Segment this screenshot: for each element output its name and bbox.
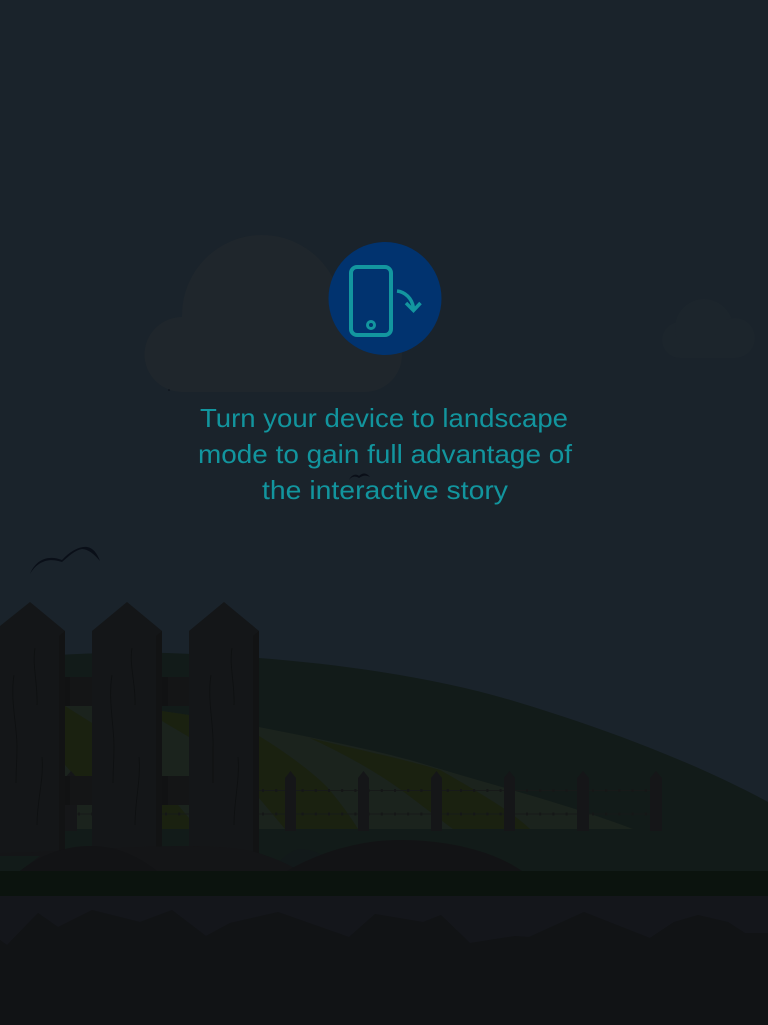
rotate arrow [397,291,420,310]
wooden fence rails [65,677,189,805]
wooden fence post 3 [189,602,259,856]
wooden fence post 1 [0,602,65,856]
bird left [30,547,100,574]
olive stripe left [259,736,358,829]
large cloud [144,235,402,392]
dark grass band [0,871,768,896]
jagged foreground terrain [0,910,768,1025]
instruction icon [328,242,442,355]
olive stripe right [310,738,530,829]
small cloud [662,299,755,358]
phone outline [351,267,391,335]
instruction text [198,403,573,505]
distant hill [0,653,768,875]
bird centre [349,474,370,480]
wire fence posts [65,771,662,831]
field seen through fence gaps [65,706,189,829]
instruction text: the interactive story [262,475,508,505]
cloud speck [168,389,170,391]
icon disc [328,242,442,355]
field patchwork [259,727,633,829]
instruction text: Turn your device to landscape [200,403,568,433]
phone home button [368,322,374,328]
barbed wire [65,790,650,814]
instruction text: mode to gain full advantage of [198,439,573,469]
lower ground band [0,896,768,1025]
wooden fence post 2 [92,602,162,856]
foreground bushes [0,840,522,871]
